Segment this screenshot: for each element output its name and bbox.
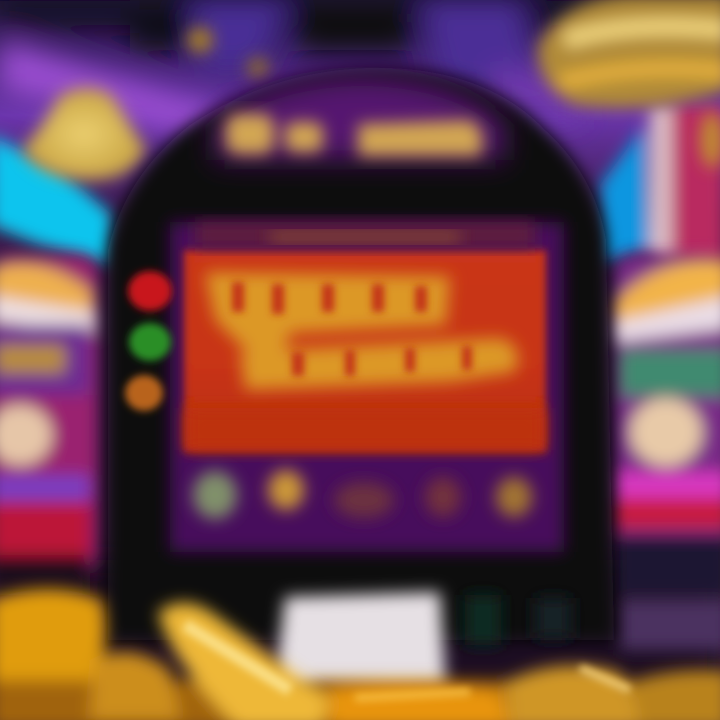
lower dark buttons xyxy=(465,595,571,645)
icon: gold bell xyxy=(22,27,269,180)
paper ticket xyxy=(274,592,446,690)
icon row xyxy=(193,470,532,519)
right cyan glow and pink column xyxy=(600,105,720,265)
right slot machine xyxy=(612,255,720,650)
machine top sign xyxy=(215,76,505,160)
screen xyxy=(170,222,564,552)
indicator lights xyxy=(125,271,172,411)
red prize panel xyxy=(184,222,546,452)
gold coins pile xyxy=(0,589,720,720)
central machine cabinet xyxy=(108,68,614,645)
left cyan glow xyxy=(0,135,112,265)
panel lettering blobs xyxy=(205,272,518,390)
sign lettering blobs xyxy=(226,114,482,156)
left slot machine xyxy=(0,255,98,595)
icon: gold coin stack xyxy=(538,0,720,168)
